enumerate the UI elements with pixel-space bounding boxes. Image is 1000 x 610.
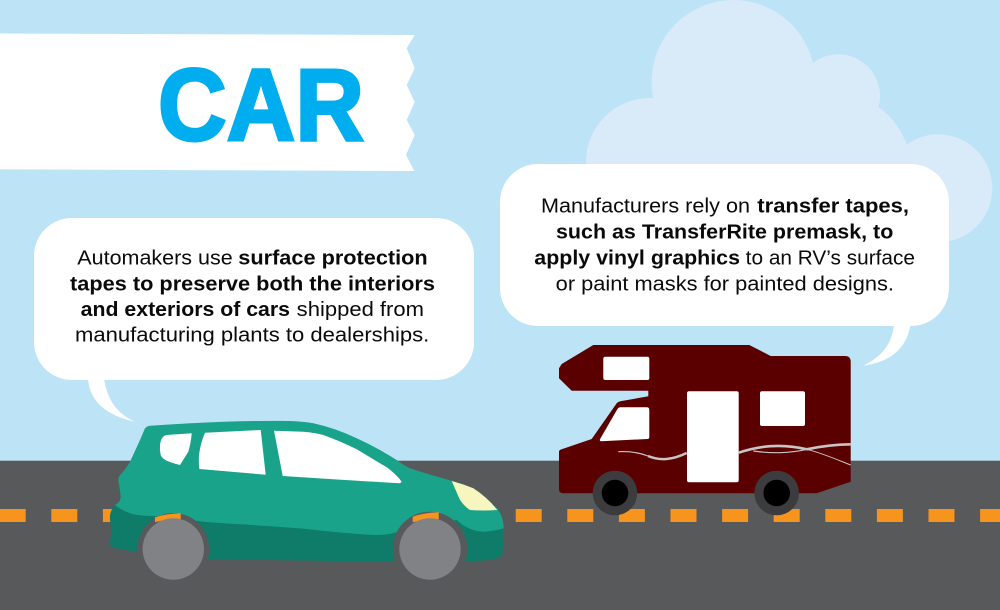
manufacturers text: apply vinyl graphics <box>534 248 740 270</box>
manufacturers text: transfer tapes, <box>757 196 909 218</box>
car wheel arches <box>137 512 467 586</box>
speech bubble: manufacturers <box>500 164 949 366</box>
automakers text: manufacturing plants to dealerships. <box>75 325 429 347</box>
RV <box>559 345 851 515</box>
cloud <box>586 0 992 255</box>
RV wheels <box>593 471 799 515</box>
automakers text <box>70 247 435 347</box>
car wheel trim <box>155 512 439 522</box>
manufacturers text <box>534 196 915 296</box>
automakers text: and exteriors of cars <box>81 299 290 321</box>
car headlight <box>452 481 497 510</box>
title banner <box>0 34 415 171</box>
automakers text: surface protection <box>238 247 428 269</box>
car wheels <box>143 518 461 580</box>
car lower body <box>109 500 504 562</box>
title: CAR <box>158 48 364 162</box>
manufacturers text: or paint masks for painted designs. <box>556 274 894 296</box>
automakers text: shipped from <box>297 299 424 321</box>
speech bubble: automakers <box>34 218 474 422</box>
manufacturers text: to an RV’s surface <box>746 248 915 270</box>
road <box>0 461 1000 610</box>
RV windows and door <box>600 357 805 482</box>
automakers text: Automakers use <box>77 247 233 269</box>
manufacturers text: such as TransferRite premask, to <box>556 222 893 244</box>
car <box>109 421 504 586</box>
automakers text: tapes to preserve both the interiors <box>70 273 435 295</box>
road centre dashes <box>0 509 1000 522</box>
manufacturers text: Manufacturers rely on <box>541 196 750 218</box>
car upper body <box>115 421 504 535</box>
RV wheel wells <box>587 465 805 521</box>
RV wave graphic <box>618 444 851 465</box>
car windows <box>160 430 402 483</box>
